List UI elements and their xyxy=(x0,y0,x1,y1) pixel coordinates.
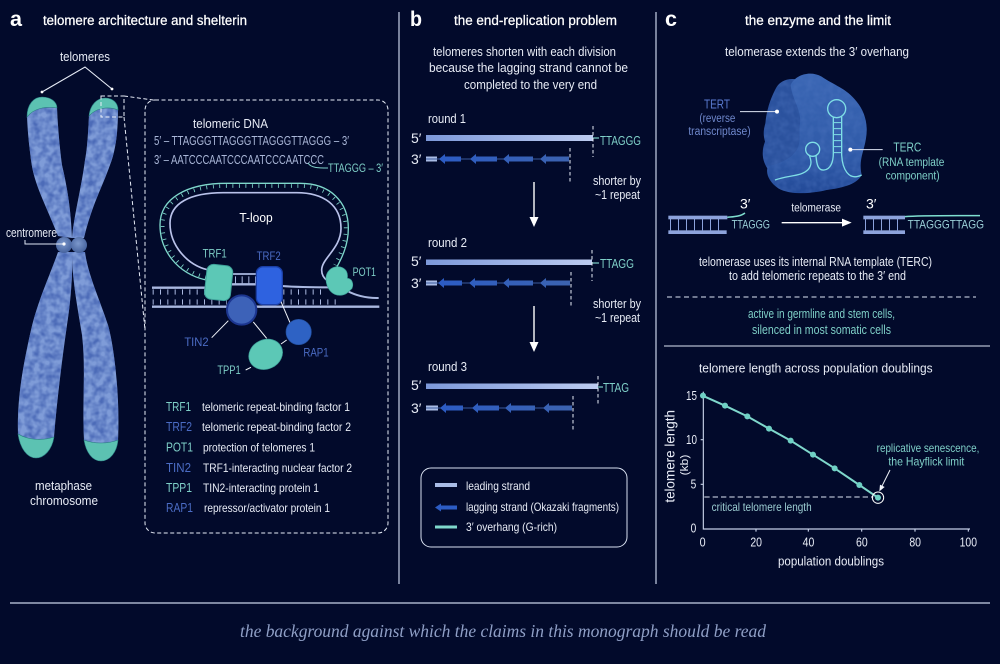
protein: POT1: POT1 xyxy=(353,265,376,279)
label: TERT: (reverse xyxy=(699,111,736,125)
intro text: because the lagging strand cannot be xyxy=(429,61,628,75)
legend: shelterin proteins: TPP1 xyxy=(166,481,192,495)
round 1: 5′ xyxy=(411,130,422,146)
text: germline and stem cell activity xyxy=(748,306,895,337)
label: TERT: TERT xyxy=(704,98,730,112)
protein: TPP1 xyxy=(217,334,288,377)
heading: panel b: the end-replication problem xyxy=(454,13,617,28)
protein: RAP1 xyxy=(286,319,329,360)
legend: shelterin proteins: TRF1-interacting nuclear factor 2 xyxy=(203,461,352,475)
label: centromere xyxy=(6,226,66,246)
label: TERC: (RNA template xyxy=(879,155,945,169)
threshold line xyxy=(704,495,873,498)
line chart: telomere length across population doublings xyxy=(663,362,979,569)
axis unit: kb: (kb) xyxy=(679,455,691,475)
legend: shelterin proteins: protection of telomeres 1 xyxy=(203,440,315,454)
protein: TIN2 xyxy=(184,295,256,349)
annotation: Hayflick limit: the Hayflick limit xyxy=(888,455,965,468)
label: T-loop: T-loop xyxy=(239,211,273,225)
DNA before extension xyxy=(668,196,770,234)
illustration: metaphase chromosome xyxy=(18,97,118,461)
arrow: round 1 to round 2 xyxy=(530,182,538,227)
legend: strand types: leading strand xyxy=(466,479,530,493)
intro text xyxy=(429,45,628,92)
DNA sequence: 5 prime strand: 5′ – TTAGGGTTAGGGTTAGGGTTAGGG – 3′ xyxy=(154,134,350,148)
label: telomeres: telomeres xyxy=(60,50,110,64)
axis title: x: population doublings xyxy=(778,555,884,569)
axis tick labels: 100 xyxy=(960,536,977,550)
intro text: completed to the very end xyxy=(464,78,597,92)
round 2: 3′ xyxy=(411,275,422,291)
RNA hairpin xyxy=(775,100,862,180)
legend: shelterin proteins: telomeric repeat-binding factor 1 xyxy=(202,400,350,414)
round 1: TTAGGG xyxy=(600,134,641,148)
legend: shelterin proteins: TRF1 xyxy=(166,400,191,414)
label: TERC: component) xyxy=(886,168,940,182)
axis tick labels: 5 xyxy=(691,478,696,492)
note: shorter by 1 repeat: shorter by xyxy=(593,297,642,311)
DNA after extension: 3′ xyxy=(866,196,877,212)
label: metaphase chromosome xyxy=(30,479,98,508)
DNA sequence: overhang xyxy=(308,163,383,175)
legend: shelterin proteins: TRF2 xyxy=(166,420,192,434)
zoom callout box with connector lines xyxy=(101,96,153,330)
label: metaphase chromosome: chromosome xyxy=(30,494,98,508)
legend: shelterin proteins: RAP1 xyxy=(166,501,193,515)
axis tick labels: 15 xyxy=(686,389,697,403)
panel letter b: b xyxy=(410,8,422,31)
round 3: TTAG xyxy=(603,381,629,395)
text: germline and stem cell activity: silenced in most somatic cells xyxy=(752,322,891,337)
legend: shelterin proteins: repressor/activator protein 1 xyxy=(204,501,330,515)
protein: TRF1: TRF1 xyxy=(203,246,227,260)
label: TERT xyxy=(688,98,779,138)
intro text: telomeres shorten with each division xyxy=(433,45,616,59)
arrow: telomerase reaction xyxy=(782,200,852,227)
panel: c the enzyme and the limit xyxy=(663,8,990,569)
text: telomerase mechanism xyxy=(699,255,932,283)
round 1: 3′ xyxy=(411,151,422,167)
heading: telomeric DNA: telomeric DNA xyxy=(193,117,269,131)
legend: shelterin proteins: POT1 xyxy=(166,440,193,454)
note: shorter by 1 repeat: ~1 repeat xyxy=(595,188,640,202)
T-loop strands xyxy=(160,183,348,281)
round 1: round 1 xyxy=(428,112,466,126)
legend: strand types xyxy=(421,468,627,547)
protein: TRF1 xyxy=(203,246,233,301)
annotation: Hayflick limit: replicative senescence, xyxy=(877,442,979,455)
chart title: telomere length across population doublings xyxy=(699,362,933,376)
label: TERC xyxy=(848,140,945,182)
DNA sequence: 3 prime strand: 3′ – AATCCCAATCCCAATCCCAATCCC xyxy=(154,153,324,167)
label: TERT: transcriptase) xyxy=(688,124,751,138)
threshold label: critical telomere length xyxy=(712,501,812,514)
protein: TPP1: TPP1 xyxy=(217,363,241,377)
axis tick labels: 0 xyxy=(691,521,696,535)
axis title: y: telomere length xyxy=(663,410,678,503)
round 2: round 2 xyxy=(428,236,467,250)
legend: shelterin proteins xyxy=(166,400,352,515)
enzyme body xyxy=(763,74,867,193)
legend: shelterin proteins: TIN2 xyxy=(166,461,191,475)
DNA sequence: overhang: TTAGGG – 3′ xyxy=(328,163,383,175)
panel letter c: c xyxy=(665,8,677,31)
note: shorter by 1 repeat xyxy=(593,174,642,202)
round 3: round 3 xyxy=(428,360,467,374)
note: shorter by 1 repeat xyxy=(593,297,642,325)
note: shorter by 1 repeat: shorter by xyxy=(593,174,642,188)
round 3: 3′ xyxy=(411,400,422,416)
round 1 xyxy=(411,112,641,183)
panel: b the end-replication problem xyxy=(410,8,642,547)
protein: TIN2: TIN2 xyxy=(184,335,209,349)
DNA before extension: 3′ xyxy=(740,196,751,212)
text: telomerase mechanism: to add telomeric repeats to the 3′ end xyxy=(729,269,906,283)
round 2 xyxy=(411,236,634,306)
arrow: telomerase reaction: telomerase xyxy=(791,200,841,214)
protein: TRF2 xyxy=(256,249,282,305)
axis tick labels: 40 xyxy=(803,536,814,550)
axis tick labels xyxy=(686,389,977,550)
legend: shelterin proteins: TIN2-interacting protein 1 xyxy=(203,481,319,495)
label: centromere: centromere xyxy=(6,226,57,240)
label: metaphase chromosome: metaphase xyxy=(35,479,92,493)
axis tick labels: 60 xyxy=(856,536,868,550)
legend: strand types: 3′ overhang (G-rich) xyxy=(466,520,557,534)
panel letter a: a xyxy=(10,8,22,31)
annotation: Hayflick limit xyxy=(877,442,979,491)
heading: panel c: the enzyme and the limit xyxy=(745,13,891,28)
protein: TRF2: TRF2 xyxy=(257,249,281,263)
DNA after extension xyxy=(863,196,984,234)
connector lines xyxy=(212,302,290,370)
round 3: 5′ xyxy=(411,377,422,393)
text: germline and stem cell activity: active in germline and stem cells, xyxy=(748,306,895,321)
diagram: T-loop and shelterin complex xyxy=(152,183,379,377)
legend: shelterin proteins: telomeric repeat-binding factor 2 xyxy=(202,420,351,434)
note: shorter by 1 repeat: ~1 repeat xyxy=(595,311,640,325)
axis tick labels: 80 xyxy=(909,536,921,550)
legend: strand types: lagging strand (Okazaki fragments) xyxy=(466,500,619,514)
data series xyxy=(700,393,884,503)
footer caption: the background against which the claims in this monograph should be read xyxy=(240,621,766,641)
label: telomeres xyxy=(41,50,113,93)
round 2: TTAGG xyxy=(600,257,634,271)
protein: RAP1: RAP1 xyxy=(303,346,329,360)
DNA after extension: TTAGGGTTAGG xyxy=(908,217,984,231)
panel: a telomere architecture and shelterin xyxy=(6,8,388,533)
diagram: telomerase enzyme and extension xyxy=(668,74,984,234)
panel: telomeric DNA detail xyxy=(145,100,388,533)
round 2: 5′ xyxy=(411,253,422,269)
axis tick labels: 10 xyxy=(686,433,697,447)
duplex DNA xyxy=(152,274,379,307)
heading: panel a: telomere architecture and shelterin xyxy=(43,13,247,28)
subheading: telomerase extends: telomerase extends the 3′ overhang xyxy=(725,45,909,59)
DNA before extension: TTAGGG xyxy=(732,217,770,231)
round 3 xyxy=(411,360,629,431)
axes xyxy=(701,392,970,532)
axis tick labels: 20 xyxy=(750,536,762,550)
text: telomerase mechanism: telomerase uses its internal RNA template (TERC) xyxy=(699,255,932,269)
protein: POT1 xyxy=(326,265,376,295)
axis tick labels: 0 xyxy=(700,536,706,550)
label: TERC: TERC xyxy=(893,140,921,154)
arrow: round 2 to round 3 xyxy=(530,306,538,352)
